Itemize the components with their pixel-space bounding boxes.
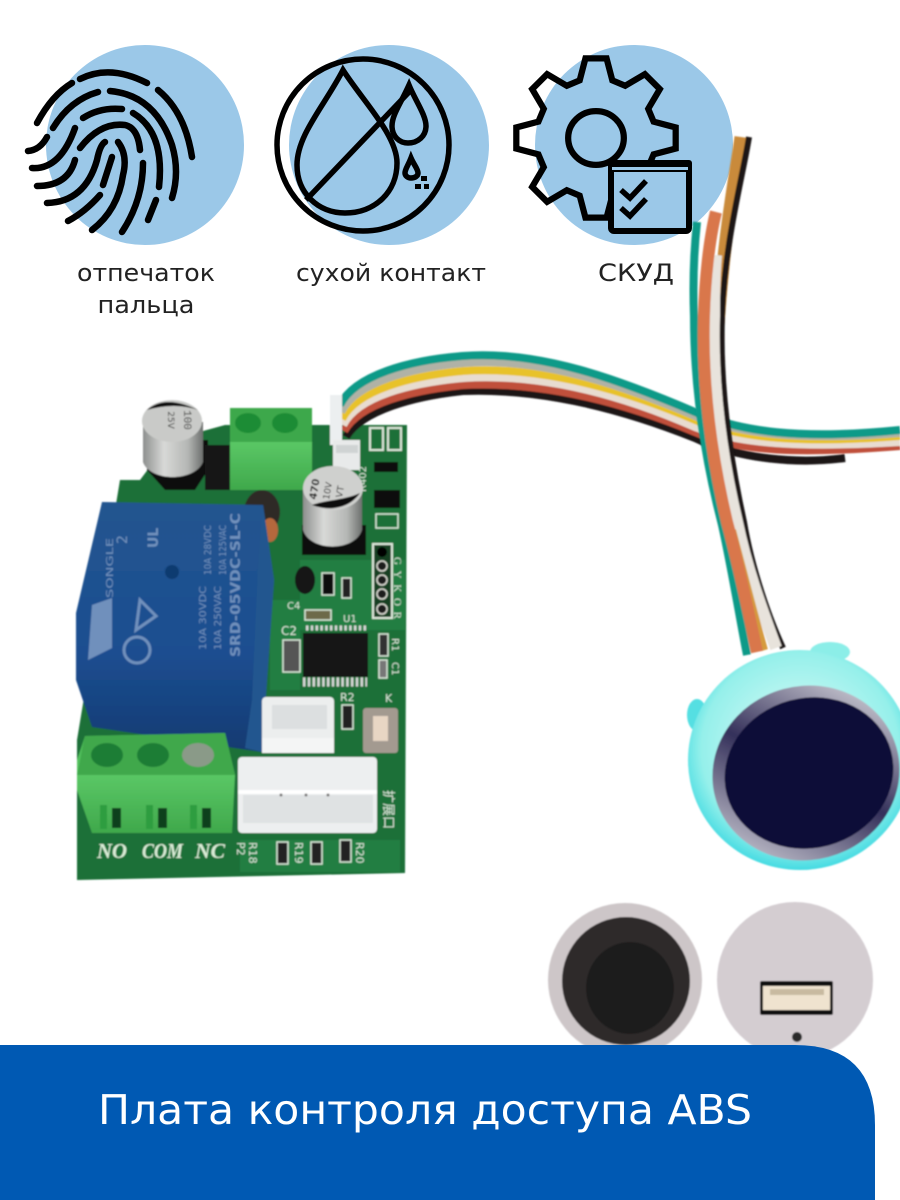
bottom resistors and silkscreen: P2 bbox=[234, 842, 247, 856]
chip U1: C1 bbox=[389, 662, 400, 675]
relay: SONGLE bbox=[105, 538, 116, 598]
label: fingerprint: отпечаток bbox=[77, 259, 215, 287]
icon: gear with checklist bbox=[516, 45, 733, 245]
cable connector bbox=[330, 395, 360, 470]
label: fingerprint bbox=[77, 259, 215, 319]
resistor R2 bbox=[340, 691, 393, 729]
bottom resistors and silkscreen: 扩展口 bbox=[380, 790, 399, 829]
terminal labels bbox=[96, 839, 226, 863]
terminal labels: NC bbox=[194, 839, 226, 863]
banner bbox=[0, 1045, 875, 1200]
resistor R2: R2 bbox=[340, 691, 355, 704]
bottom resistors and silkscreen: R20 bbox=[353, 842, 366, 864]
small transistor and resistors: C4 bbox=[287, 601, 300, 612]
silkscreen parts: top right: R402 bbox=[358, 466, 369, 492]
photo: sensor front bbox=[548, 903, 702, 1057]
pin header: GYKOR bbox=[391, 557, 403, 620]
terminal labels: COM bbox=[142, 839, 184, 863]
small transistor and resistors bbox=[281, 566, 357, 672]
capacitor 470 bbox=[302, 466, 366, 555]
capacitor 470: 470 bbox=[308, 478, 323, 501]
icon: no water bbox=[277, 45, 489, 245]
relay: 10A 28VDC bbox=[203, 525, 214, 575]
relay: UL bbox=[146, 528, 162, 548]
relay: 10A 250VAC bbox=[213, 586, 224, 650]
chip U1: R1 bbox=[389, 638, 400, 651]
relay: 2 bbox=[115, 535, 131, 544]
photo: glowing fingerprint sensor bbox=[687, 642, 900, 881]
relay: 10A 30VDC bbox=[198, 586, 209, 650]
small transistor and resistors: U1 bbox=[343, 614, 357, 625]
white connector small bbox=[262, 697, 334, 753]
terminal block: two way bbox=[230, 408, 312, 490]
photo: sensor back bbox=[717, 902, 873, 1058]
silkscreen parts: top right bbox=[358, 428, 401, 528]
capacitor 100: 25V bbox=[165, 411, 175, 430]
capacitor 470: 10V bbox=[322, 481, 335, 501]
photo: relay control board bbox=[76, 355, 900, 880]
relay: 10A 125VAC bbox=[218, 525, 229, 575]
icon: fingerprint bbox=[28, 45, 244, 245]
push button bbox=[363, 708, 398, 753]
capacitor 100: 100 bbox=[180, 410, 192, 430]
small transistor and resistors: C2 bbox=[281, 624, 297, 638]
banner title: Плата контроля доступа ABS bbox=[98, 1086, 752, 1134]
terminal labels: NO bbox=[96, 839, 127, 863]
board bbox=[77, 425, 407, 880]
bottom resistors and silkscreen bbox=[234, 790, 399, 864]
relay: SRD-05VDC-SL-C bbox=[229, 513, 244, 657]
capacitor 100 bbox=[142, 400, 208, 490]
label: fingerprint: пальца bbox=[98, 291, 194, 319]
relay bbox=[76, 502, 274, 752]
chip U1 bbox=[303, 628, 400, 682]
white connector large bbox=[238, 757, 377, 833]
pin header bbox=[373, 544, 403, 620]
capacitor 470: VT bbox=[335, 485, 347, 499]
wires: board cable bbox=[340, 355, 900, 461]
wires: sensor cable bbox=[693, 137, 783, 655]
bottom resistors and silkscreen: R19 bbox=[292, 842, 305, 864]
label: dry contact: сухой контакт bbox=[296, 259, 486, 287]
inductor bbox=[244, 490, 280, 542]
resistor R2: K bbox=[385, 692, 393, 705]
label: access control: СКУД bbox=[598, 259, 674, 287]
terminal block: NO COM NC bbox=[77, 733, 235, 833]
bottom resistors and silkscreen: R18 bbox=[246, 842, 259, 864]
